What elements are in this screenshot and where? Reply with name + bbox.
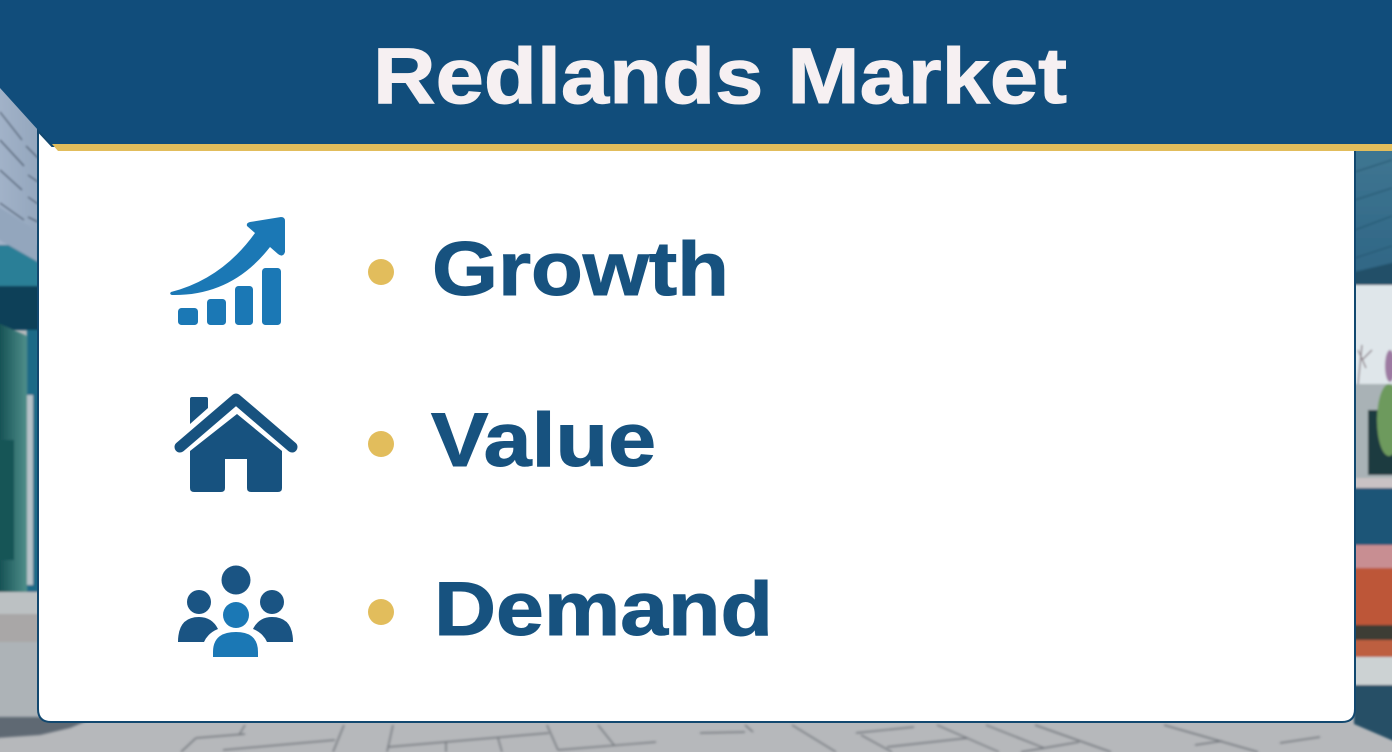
bullet: growth: [368, 259, 394, 285]
label: demand: Demand: [434, 567, 773, 652]
content panel: [38, 131, 1355, 722]
bullet: value: [368, 431, 394, 457]
row: value: [180, 397, 656, 492]
icon: growth chart with arrow: [170, 217, 285, 325]
icon: people group: [178, 566, 293, 657]
left building facade: [0, 80, 40, 722]
label: growth: Growth: [432, 227, 729, 312]
bullet: demand: [368, 599, 394, 625]
row: demand: [178, 566, 773, 657]
row: growth: [170, 217, 729, 325]
title: Redlands Market: [373, 31, 1067, 120]
label: value: Value: [431, 398, 656, 483]
icon: house: [180, 397, 292, 492]
header banner: [0, 0, 1392, 146]
right street scene: [1354, 148, 1392, 742]
paving stones: [0, 717, 1320, 752]
gold divider: [52, 144, 1392, 151]
